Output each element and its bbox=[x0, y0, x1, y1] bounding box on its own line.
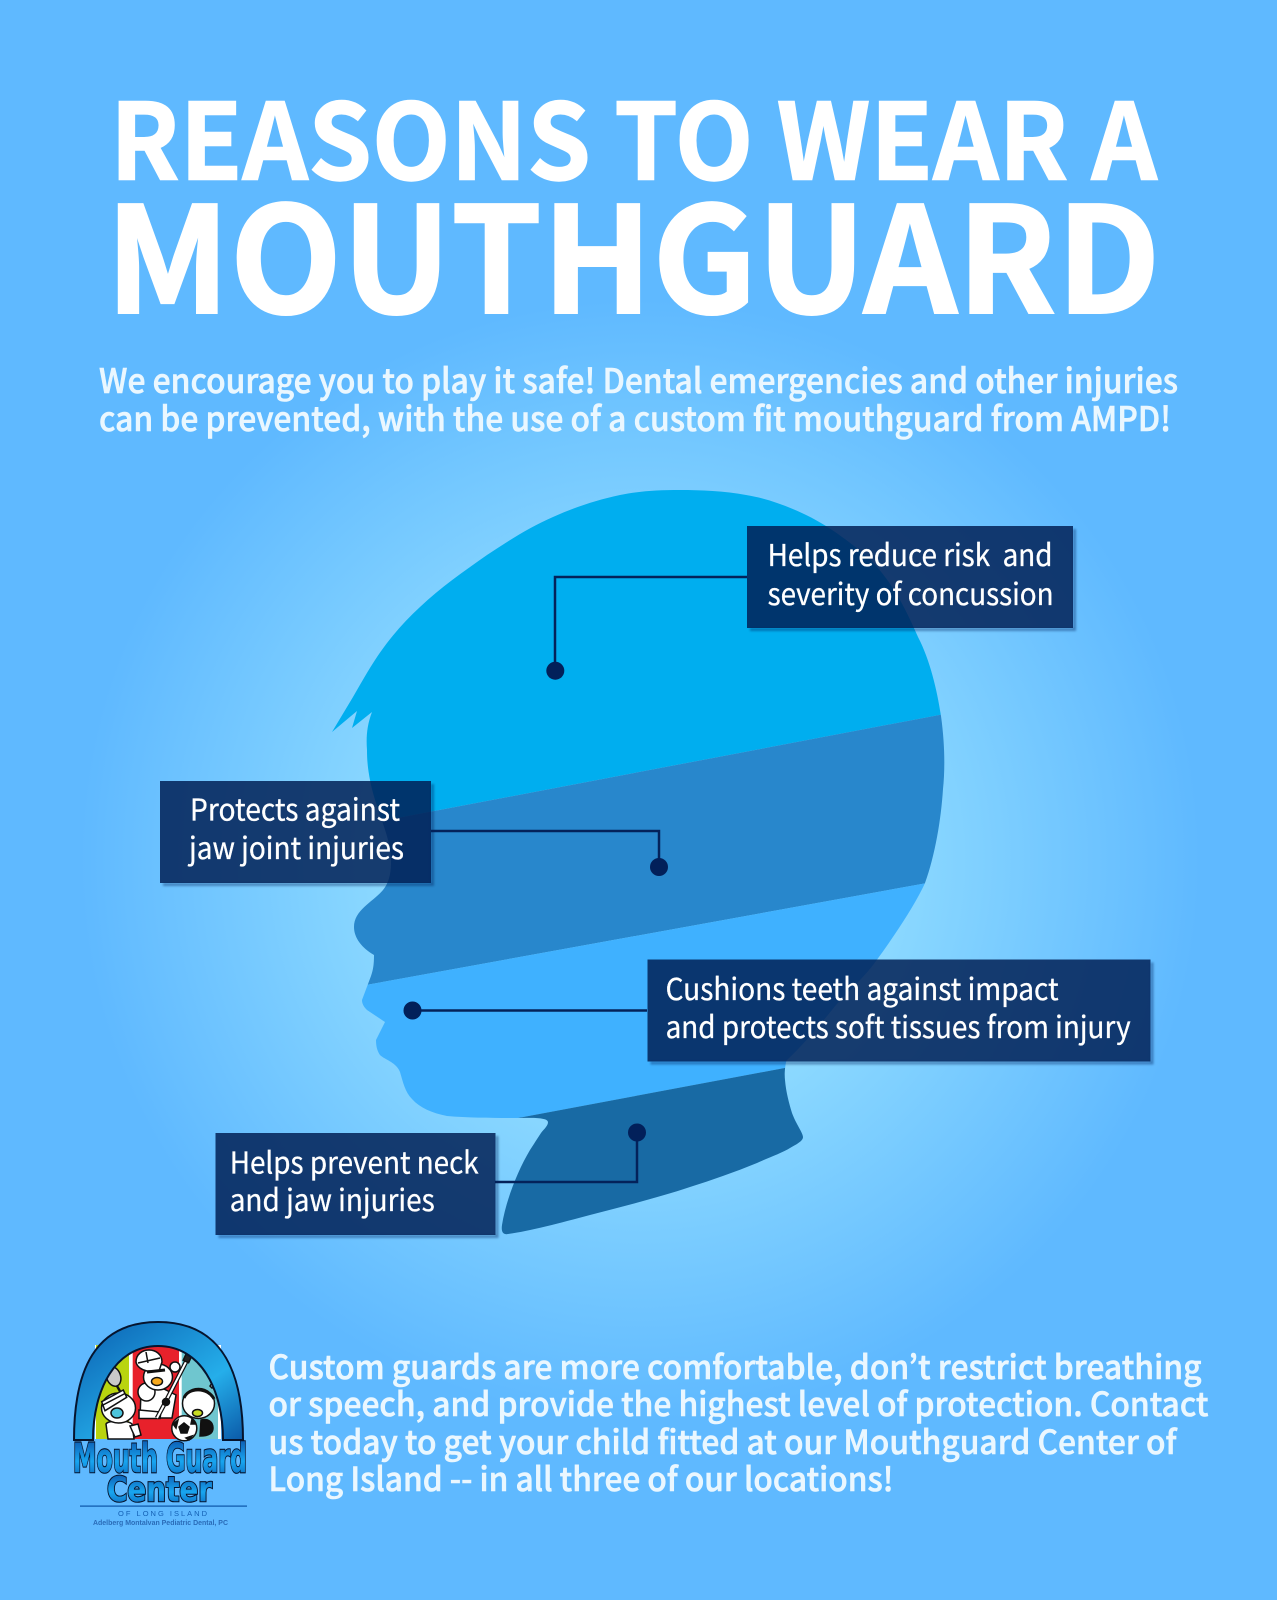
hockey child bbox=[136, 1350, 192, 1418]
dot: teeth bbox=[404, 1002, 422, 1020]
head band: teeth bbox=[362, 884, 925, 1118]
title line 2: MOUTHGUARD bbox=[106, 143, 1160, 356]
soccer child bbox=[172, 1378, 218, 1441]
connector: teeth bbox=[412, 1009, 647, 1012]
logo children bbox=[102, 1350, 218, 1441]
logo wordmark: Mouth Guard bbox=[73, 1436, 247, 1482]
callout: neck: and jaw injuries bbox=[230, 1176, 435, 1220]
title line 1: REASONS TO WEAR A bbox=[110, 58, 1158, 210]
callout: neck: Helps prevent neck bbox=[230, 1138, 479, 1182]
dot: concussion bbox=[546, 662, 564, 680]
connector: concussion bbox=[555, 577, 747, 670]
logo subline: OF LONG ISLAND bbox=[118, 1509, 208, 1518]
closing text: Long Island -- in all three of our locations! bbox=[268, 1453, 894, 1501]
closing text: Custom guards are more comfortable, don’t restrict breathing bbox=[268, 1341, 1202, 1389]
callout: concussion: Helps reduce risk and bbox=[768, 531, 1053, 575]
head band: jaw joint bbox=[354, 714, 944, 985]
logo: Mouth Guard Center bbox=[73, 1322, 247, 1527]
logo wordmark bbox=[73, 1436, 247, 1510]
dot: neck bbox=[628, 1124, 646, 1142]
callout: concussion bbox=[747, 526, 1076, 631]
closing text: or speech, and provide the highest level of protection. Contact bbox=[268, 1378, 1208, 1426]
dot: jaw joint bbox=[650, 858, 668, 876]
logo wordmark: Mouth Guard bbox=[73, 1436, 247, 1482]
head silhouette bbox=[332, 490, 944, 1234]
intro text: We encourage you to play it safe! Dental emergencies and other injuries bbox=[99, 354, 1178, 403]
logo wordmark: Center bbox=[107, 1470, 212, 1510]
callout: neck bbox=[216, 1133, 498, 1238]
callout: jaw joint: jaw joint injuries bbox=[187, 824, 404, 868]
lacrosse stick bbox=[104, 1365, 123, 1393]
callout: concussion: severity of concussion bbox=[768, 570, 1054, 614]
callout: jaw joint bbox=[160, 781, 434, 886]
logo panels bbox=[95, 1345, 221, 1439]
head band: neck bbox=[502, 1068, 803, 1234]
logo rule bbox=[80, 1506, 247, 1507]
callout: teeth: Cushions teeth against impact bbox=[666, 965, 1059, 1009]
lacrosse child bbox=[102, 1390, 141, 1439]
closing text: us today to get your child fitted at our Mouthguard Center of bbox=[268, 1416, 1178, 1464]
connector: neck bbox=[495, 1132, 637, 1182]
title bbox=[106, 58, 1160, 356]
head band: brain bbox=[332, 490, 941, 820]
logo practice name: Adelberg Montalvan Pediatric Dental, PC bbox=[93, 1520, 228, 1527]
logo arch bbox=[74, 1322, 243, 1440]
callout: teeth: and protects soft tissues from injury bbox=[666, 1003, 1131, 1047]
intro text: can be prevented, with the use of a custom fit mouthguard from AMPD! bbox=[99, 392, 1171, 441]
closing text bbox=[268, 1341, 1208, 1501]
connector: jaw joint bbox=[431, 831, 659, 867]
callout: jaw joint: Protects against bbox=[190, 786, 400, 830]
callout: teeth bbox=[648, 960, 1154, 1064]
logo wordmark: Center bbox=[107, 1470, 212, 1510]
intro text bbox=[99, 354, 1178, 441]
background glow bbox=[80, 300, 1200, 1420]
